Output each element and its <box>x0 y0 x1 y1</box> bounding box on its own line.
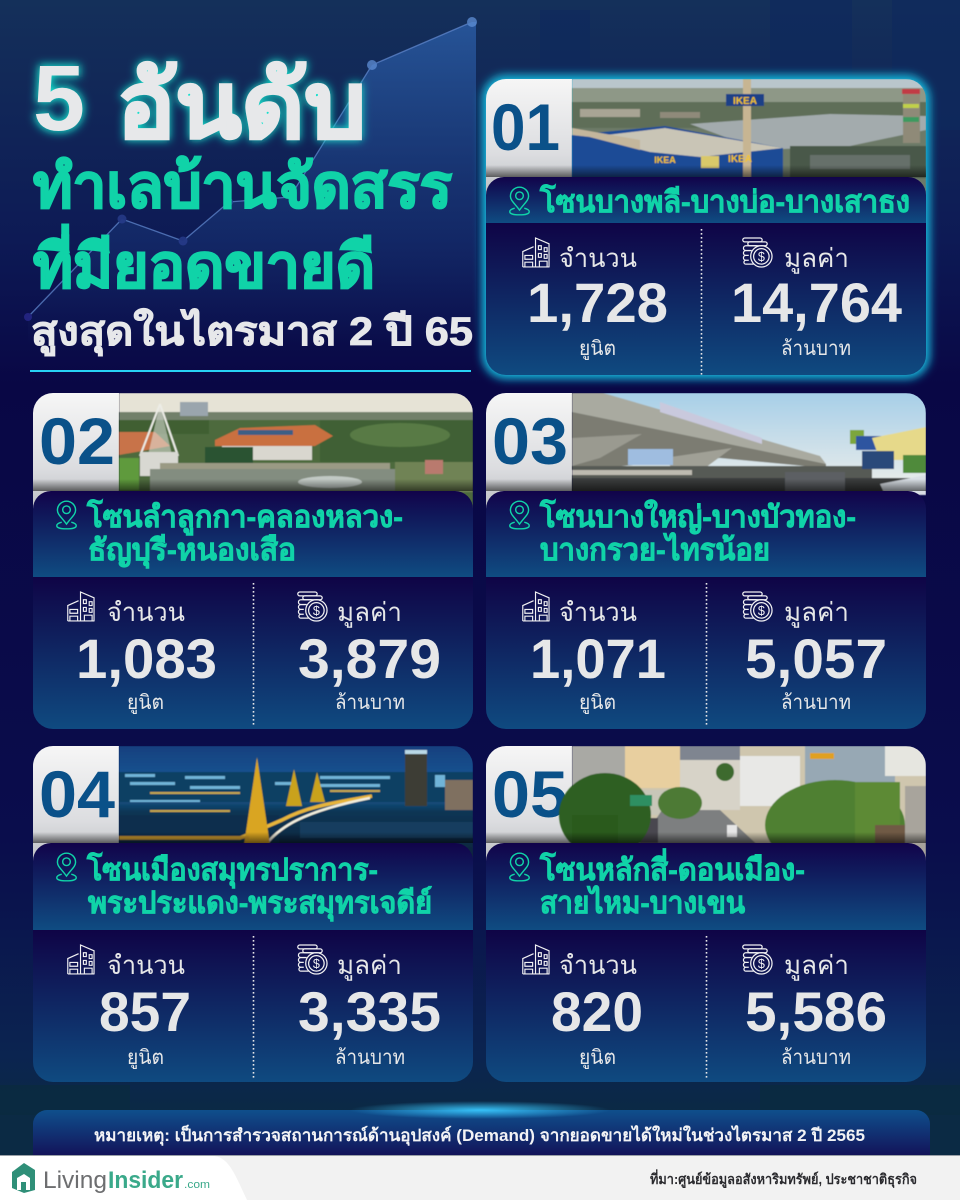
title: 5 <box>33 46 85 150</box>
photo: IKEA Bangna <box>572 79 926 199</box>
title band 02 <box>33 491 473 577</box>
stats 03: 5,057 <box>745 627 887 690</box>
stats 03: จำนวน <box>559 597 637 627</box>
title band 02: โซนลำลูกกา-คลองหลวง- <box>86 498 403 536</box>
source credit: ที่มา:ศูนย์ข้อมูลอสังหาริมทรัพย์, ประชาชาติธุรกิจ <box>650 1169 917 1188</box>
stats 04: จำนวน <box>107 950 185 980</box>
title band 03: โซนบางใหญ่-บางบัวทอง- <box>539 498 856 535</box>
logo: LivingInsider: Insider <box>108 1167 183 1194</box>
card glow <box>482 75 930 379</box>
stats 03: 1,071 <box>530 627 666 690</box>
number badge 04 <box>33 746 119 871</box>
stats 03: มูลค่า <box>784 597 849 628</box>
stats 05: มูลค่า <box>784 950 849 981</box>
title: สูงสุดในไตรมาส 2 ปี 65 <box>31 308 473 357</box>
title band 04: พระประแดง-พระสมุทรเจดีย์ <box>88 886 432 922</box>
stats 04: 857 <box>99 980 191 1043</box>
number badge 03 <box>486 393 572 518</box>
panel: zone 01 <box>486 79 926 375</box>
number badge 01 <box>486 79 572 204</box>
title band 03 <box>486 491 926 577</box>
title band 01: โซนบางพลี-บางบ่อ-บางเสาธง <box>539 183 910 219</box>
stats 03: ล้านบาท <box>781 692 851 714</box>
stats 02 <box>33 577 473 729</box>
photo: elevated rail <box>572 393 926 495</box>
title band 01 <box>486 177 926 223</box>
stats 02: มูลค่า <box>337 597 402 628</box>
title band 05: โซนหลักสี่-ดอนเมือง- <box>539 848 805 887</box>
stats 05: 820 <box>551 980 643 1043</box>
title: อันดับ <box>117 55 366 157</box>
note bar <box>33 1101 930 1155</box>
number badge 02 <box>33 393 119 518</box>
panel: zone 03 <box>486 393 926 729</box>
note bar: หมายเหตุ: เป็นการสำรวจสถานการณ์ด้านอุปสงค์ (Demand) จากยอดขายได้ใหม่ในช่วงไตรมาส 2 ปี 2565 <box>94 1123 865 1146</box>
stats 01: ยูนิต <box>579 338 616 361</box>
logo: LivingInsider <box>12 1163 210 1194</box>
stats 01: จำนวน <box>559 243 637 273</box>
title: 5 <box>33 46 85 150</box>
title: ที่มียอดขายดี <box>33 224 375 300</box>
title band 05: สายไหม-บางเขน <box>540 885 745 920</box>
logo: LivingInsider: Living <box>43 1167 107 1194</box>
number badge 05 <box>486 746 572 871</box>
stats 01: 14,764 <box>731 271 902 334</box>
title band 04 <box>33 843 473 930</box>
title band 04: โซนเมืองสมุทรปราการ- <box>86 851 378 889</box>
stats 04: มูลค่า <box>337 950 402 981</box>
photo: Lak Si street <box>559 746 926 870</box>
stats 02: 1,083 <box>76 627 217 690</box>
panel: zone 02 <box>33 393 473 729</box>
number badge 01: 01 <box>491 90 560 164</box>
footer <box>0 1155 960 1200</box>
logo: LivingInsider: .com <box>184 1179 210 1191</box>
title band 02: ธัญบุรี-หนองเสือ <box>88 534 296 569</box>
stats 04: ล้านบาท <box>335 1047 405 1069</box>
stats 05: ยูนิต <box>579 1047 616 1070</box>
title: ทำเลบ้านจัดสรร <box>33 153 452 220</box>
title <box>31 46 473 357</box>
number badge 02: 02 <box>39 404 115 478</box>
stats 05: จำนวน <box>559 950 637 980</box>
photo: IKEA Bangna: IKEA <box>654 155 676 165</box>
stats 01 <box>486 223 926 375</box>
stats 03: ยูนิต <box>579 692 616 715</box>
photo: campus <box>119 393 473 513</box>
stats 04: 3,335 <box>298 980 441 1043</box>
title band 03: บางกรวย-ไทรน้อย <box>540 532 770 567</box>
stats 04: ยูนิต <box>127 1047 164 1070</box>
number badge 03: 03 <box>492 404 568 478</box>
stats 02: 3,879 <box>298 627 441 690</box>
stats 02: ยูนิต <box>127 692 164 715</box>
stats 02: จำนวน <box>107 597 185 627</box>
stats 01: 1,728 <box>527 271 668 334</box>
photo: IKEA Bangna: IKEA <box>733 96 757 107</box>
title: อันดับ <box>117 55 366 157</box>
stats 01: มูลค่า <box>784 243 849 274</box>
stats 02: ล้านบาท <box>335 692 405 714</box>
photo: Bhumibol bridge at night <box>119 746 473 866</box>
chart line decoration <box>24 17 477 321</box>
panel: zone 05 <box>486 746 926 1082</box>
stats 05: ล้านบาท <box>781 1047 851 1069</box>
stats 05 <box>486 930 926 1082</box>
title band 05 <box>486 843 926 930</box>
photo: IKEA Bangna: IKEA <box>728 154 752 165</box>
stats 01: ล้านบาท <box>781 338 851 360</box>
stats 03 <box>486 577 926 729</box>
number badge 04: 04 <box>39 757 115 831</box>
stats 04 <box>33 930 473 1082</box>
stats 05: 5,586 <box>745 980 887 1043</box>
panel: zone 04 <box>33 746 473 1082</box>
title underline <box>30 370 471 372</box>
number badge 05: 05 <box>492 757 568 831</box>
